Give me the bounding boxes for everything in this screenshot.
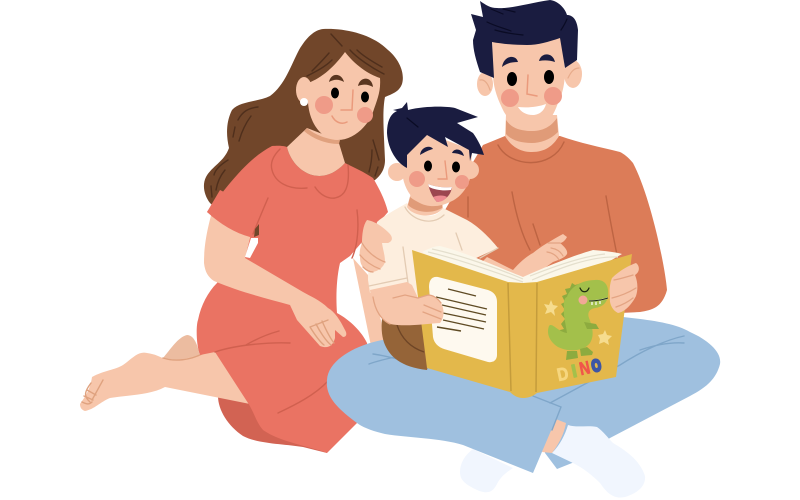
father ear detail — [480, 68, 579, 90]
book spine lines — [508, 283, 537, 392]
mother back foot — [163, 335, 200, 362]
father head — [471, 0, 582, 152]
mother hair back — [204, 29, 403, 233]
sleeve fold — [253, 198, 268, 234]
mother neck — [287, 128, 345, 176]
mother hand on boy shoulder — [360, 220, 392, 272]
book title — [555, 355, 603, 385]
jeans folds — [369, 336, 684, 430]
jeans back leg — [530, 317, 720, 469]
mother face — [308, 52, 380, 140]
father smile — [518, 104, 546, 115]
father cheeks — [501, 87, 562, 107]
book pages — [422, 246, 622, 290]
mother cheeks — [315, 96, 373, 123]
gap between arm and body — [245, 238, 258, 258]
stars — [544, 300, 612, 345]
hair sliver under sleeve — [254, 224, 259, 237]
mother — [80, 29, 403, 453]
father hair — [471, 0, 578, 78]
father ankle — [542, 418, 566, 453]
mother front leg — [80, 350, 250, 411]
mother sleeve — [207, 190, 256, 237]
father hair strands — [487, 9, 567, 35]
mother lower skirt shadow — [218, 380, 327, 453]
boy mouth — [428, 184, 452, 202]
sweater folds — [468, 142, 617, 255]
mother ear — [296, 77, 312, 103]
mother collar — [271, 149, 348, 198]
father neck shadow — [506, 118, 558, 143]
father neck — [505, 115, 559, 152]
boy shirt — [368, 203, 498, 300]
boy eyes — [424, 160, 460, 172]
father torso — [445, 136, 667, 320]
page text lines — [436, 289, 487, 331]
father hand on book — [610, 263, 639, 313]
boy neck — [407, 193, 443, 215]
boy ears — [388, 161, 479, 181]
father left sock — [460, 449, 513, 492]
mother earring — [300, 98, 308, 106]
book title: O — [590, 355, 603, 375]
boy pointing arm — [482, 234, 567, 285]
boy face — [403, 133, 472, 206]
boy — [368, 102, 567, 300]
jeans front leg — [327, 335, 561, 473]
dinosaur eye — [580, 288, 589, 292]
dinosaur mouth — [589, 298, 608, 305]
book text page — [429, 277, 497, 362]
dinosaur spikes — [549, 283, 582, 345]
dinosaur arm and legs — [566, 322, 599, 360]
boy cheeks — [409, 171, 469, 189]
father sweater — [445, 136, 667, 320]
boy shorts — [382, 318, 440, 370]
dinosaur body — [548, 280, 608, 350]
book title: D — [555, 363, 570, 385]
mother eyebrows — [329, 75, 373, 87]
open book — [412, 246, 632, 398]
father ears — [477, 60, 582, 96]
boy hair — [387, 102, 484, 168]
father right sock — [552, 425, 645, 498]
mother arm behind boy — [353, 258, 386, 346]
boy arm on book — [370, 282, 444, 325]
mother arm — [204, 205, 346, 347]
mother hair strands — [211, 34, 384, 197]
book title: N — [578, 358, 592, 379]
mother nose and smile — [332, 90, 353, 123]
boy nose — [438, 161, 447, 179]
father eyebrows — [502, 54, 555, 67]
mother neck shadow — [304, 128, 340, 144]
mother eyes — [331, 88, 369, 102]
dinosaur — [548, 280, 608, 360]
dinosaur cheek — [578, 296, 588, 304]
mother dress — [197, 146, 388, 453]
father face — [492, 30, 565, 131]
father jeans and socks — [327, 317, 720, 498]
book cover — [412, 250, 632, 398]
father eyes — [507, 70, 554, 86]
father nose — [527, 75, 537, 96]
boy eyebrows — [420, 147, 464, 156]
boy hair strand — [407, 118, 418, 127]
boy neck shadow — [408, 197, 442, 212]
book title: I — [570, 361, 579, 381]
